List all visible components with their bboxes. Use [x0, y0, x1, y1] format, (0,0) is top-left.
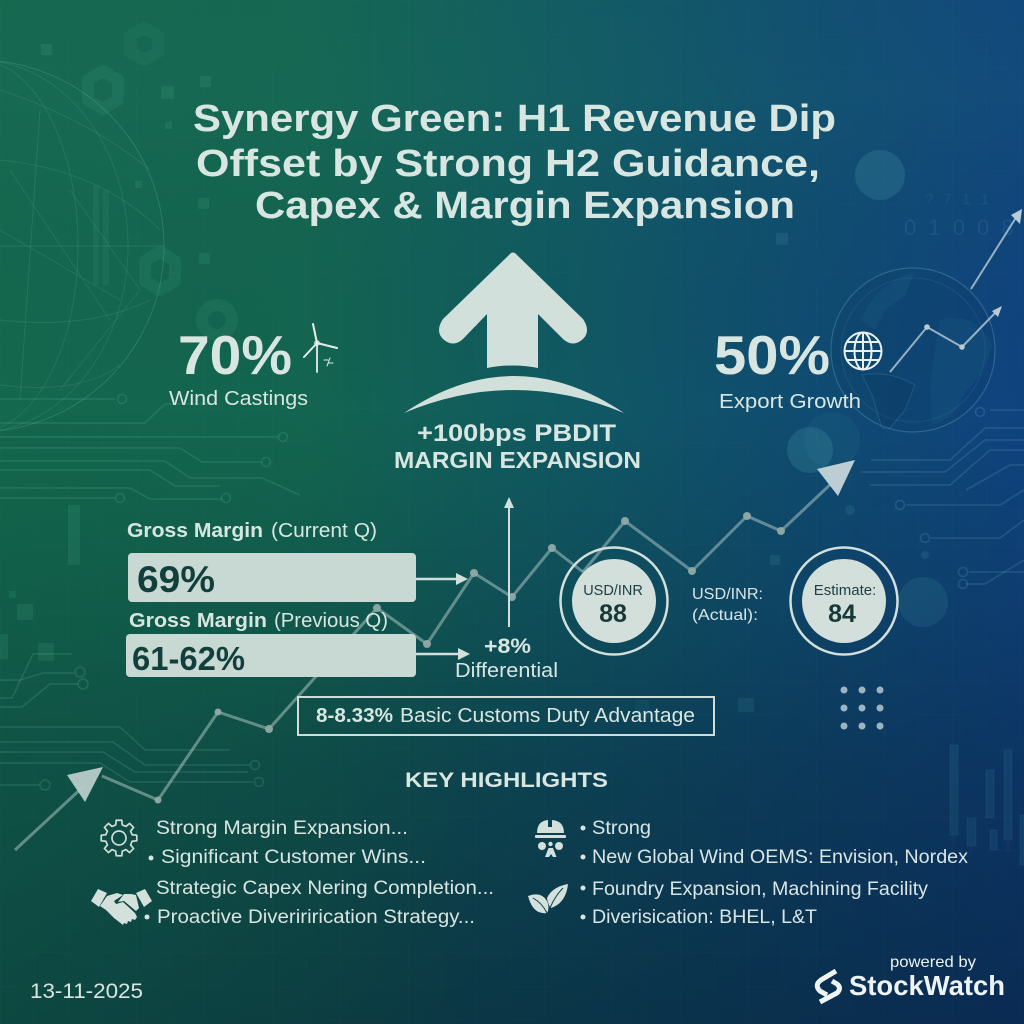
list: highlights right: [580, 818, 969, 928]
list: highlights left: Significant Customer Wins...: [161, 847, 426, 868]
bar: 69%: [128, 553, 416, 602]
badge: estimate 84: 84: [828, 600, 856, 628]
gross margin previous quarter: [126, 610, 416, 677]
stat: 70% wind castings: [169, 324, 337, 410]
title: [193, 98, 836, 227]
icon: leaves: [528, 884, 568, 913]
customs duty box: Basic Customs Duty Advantage: [400, 705, 695, 727]
background: faint hexagons and squares: [0, 28, 232, 661]
date: 13-11-2025: [30, 980, 143, 1003]
stat: 70% wind castings: Wind Castings: [169, 388, 308, 410]
logo: powered by StockWatch: [817, 954, 1005, 1002]
background: candlesticks bottom right: [950, 745, 1024, 865]
background: faint dots and discs right: [635, 150, 1024, 718]
customs duty box: 8-8.33%: [316, 705, 393, 727]
arrow: previous margin to differential: [416, 648, 470, 660]
list: highlights right: Strong: [592, 818, 651, 839]
margin expansion label: +100bps PBDIT: [417, 420, 616, 447]
bar: 61-62%: 61-62%: [132, 640, 245, 677]
stat: 50% export growth: Export Growth: [719, 391, 861, 413]
gross margin current quarter: (Current Q): [271, 520, 377, 542]
icon: globe: [844, 332, 882, 370]
logo: powered by StockWatch: powered by: [890, 954, 976, 971]
icon: handshake: [91, 889, 152, 925]
list: highlights left: Strategic Capex Nering Completion...: [156, 878, 494, 899]
logo: powered by StockWatch: StockWatch: [849, 970, 1005, 1001]
badge: estimate 84: Estimate:: [814, 582, 876, 599]
margin expansion label: MARGIN EXPANSION: [394, 447, 641, 473]
stat: 50% export growth: 50%: [714, 324, 830, 386]
bar: 69%: 69%: [137, 559, 215, 600]
badge: USD/INR 88: USD/INR: [583, 583, 643, 599]
background: faint dots and discs right: ? 7 1 1: [925, 191, 992, 208]
background: circuit traces left: [0, 394, 300, 790]
list: highlights right: New Global Wind OEMS: Envision, Nordex: [592, 847, 969, 868]
margin expansion label: [394, 420, 641, 473]
stat: 50% export growth: [714, 324, 882, 413]
bar: 61-62%: [126, 634, 416, 677]
label: USD/INR actual: USD/INR:: [692, 586, 763, 603]
label: USD/INR actual: (Actual):: [692, 607, 758, 624]
arrow: vertical differential: [504, 497, 514, 627]
gross margin previous quarter: Gross Margin: [129, 610, 267, 632]
gross margin current quarter: Gross Margin: [127, 520, 263, 542]
title: Offset by Strong H2 Guidance,: [196, 143, 820, 185]
arrow: current margin to chart: [416, 573, 468, 585]
icon: wind turbine: [304, 324, 337, 372]
badge: estimate 84: [790, 548, 898, 654]
decorative dot grid: [840, 686, 884, 730]
gross margin current quarter: [127, 520, 416, 602]
line chart: main rising trend: [15, 460, 855, 850]
background: globe right: [831, 268, 995, 432]
list: highlights left: [144, 818, 494, 928]
differential label: +8%: [484, 635, 531, 658]
big up arrow with arc: [404, 252, 624, 413]
differential label: Differential: [455, 660, 558, 682]
customs duty box: [298, 697, 714, 735]
list: highlights right: Diverisication: BHEL, L&T: [592, 907, 817, 928]
badge: USD/INR 88: 88: [599, 600, 627, 628]
title: Capex & Margin Expansion: [255, 185, 795, 227]
differential label: [455, 635, 558, 682]
gross margin previous quarter: (Previous Q): [274, 610, 388, 632]
stat: 70% wind castings: 70%: [178, 324, 292, 386]
icon: hard hat: [535, 820, 566, 857]
title: Synergy Green: H1 Revenue Dip: [193, 98, 836, 140]
icon: StockWatch S mark: [817, 971, 840, 1002]
background: wireframe globe left: [0, 60, 164, 432]
label: USD/INR actual: [692, 586, 763, 624]
background: circuit traces right: [860, 408, 1024, 588]
list: highlights left: Strong Margin Expansion...: [156, 818, 408, 839]
list: highlights left: Proactive Diveririrication Strategy...: [157, 907, 475, 928]
badge: USD/INR 88: [560, 548, 668, 654]
line chart: export growth on globe: [890, 209, 1022, 372]
list: highlights right: Foundry Expansion, Machining Facility: [592, 879, 929, 900]
icon: gear: [101, 820, 137, 856]
heading: key highlights: KEY HIGHLIGHTS: [405, 769, 608, 792]
